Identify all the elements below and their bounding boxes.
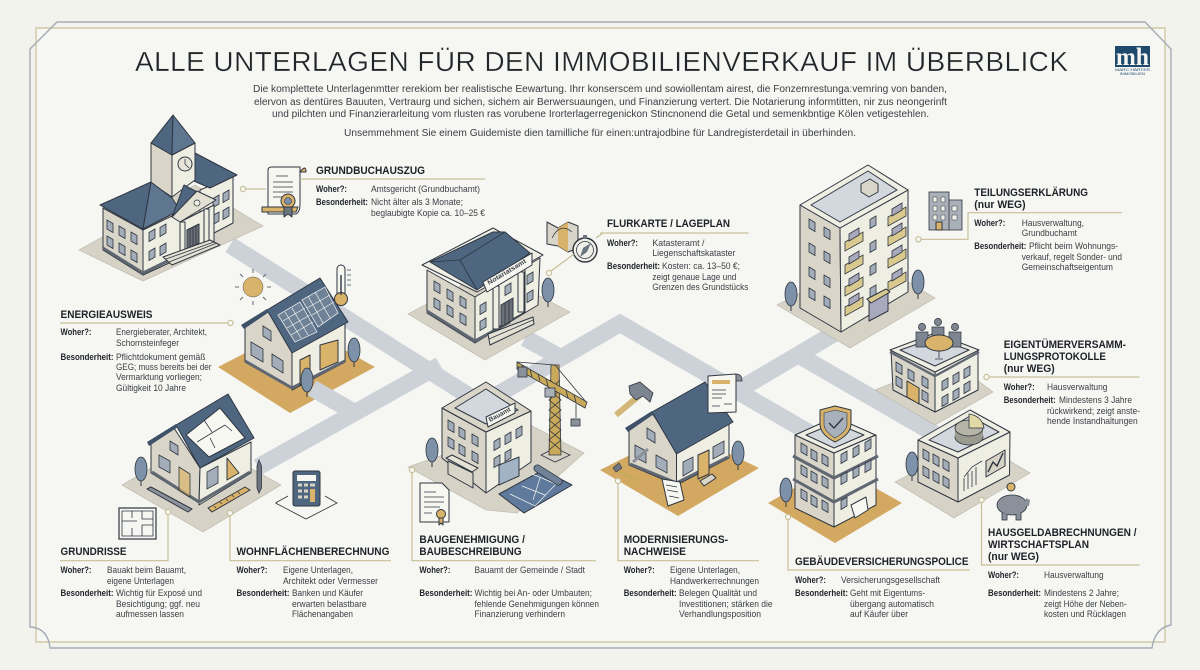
details: Eigene Unterlagen, (283, 565, 353, 576)
details: Woher?: (60, 327, 92, 338)
connector: Grundbuchauszug (240, 186, 266, 192)
details: Besonderheit: (1004, 395, 1056, 406)
title: ALLE UNTERLAGEN FÜR DEN IMMOBILIENVERKAUF IM ÜBERBLICK (135, 46, 1068, 77)
details: zeigt Höhe der Neben- (1044, 599, 1127, 610)
shield (820, 406, 851, 442)
details: Besonderheit: (795, 588, 848, 599)
heading: WIRTSCHAFTSPLAN (988, 539, 1089, 551)
balconies (845, 203, 906, 316)
logo: MARC HÄRTER (1115, 68, 1151, 72)
icon: calculator (276, 471, 337, 519)
icon: piggy bank (997, 483, 1030, 520)
roof (652, 382, 733, 454)
details: Woher?: (624, 565, 655, 576)
details: Geht mit Eigentums- (850, 588, 925, 599)
details: Katasteramt / (652, 238, 705, 249)
details: Wichtig bei An- oder Umbauten; (474, 588, 592, 599)
plot (875, 360, 993, 425)
tools on plot (613, 463, 638, 481)
icon: invoice (708, 374, 742, 413)
doors (300, 355, 310, 385)
portico (180, 205, 214, 260)
rule and connector (60, 320, 233, 326)
details (795, 575, 940, 620)
connector: Teilungserklärung (916, 213, 1122, 242)
plot (777, 258, 935, 348)
intro text (253, 84, 947, 139)
building: service charge statement (895, 410, 1030, 518)
details: Bauakt beim Bauamt, (107, 565, 186, 576)
text block: Energieausweis (60, 309, 233, 394)
details: übergang automatisch (850, 599, 934, 610)
details: Finanzierung verhindern (474, 609, 565, 620)
heading: (nur WEG) (974, 199, 1026, 211)
text block: Modernisierungsnachweise (615, 478, 773, 620)
heading: ENERGIEAUSWEIS (60, 309, 152, 321)
details: Besonderheit: (974, 241, 1026, 252)
details: Hausverwaltung (1047, 382, 1108, 393)
details (236, 565, 378, 620)
tower (151, 143, 172, 197)
door and debris (851, 497, 868, 518)
details: Hausverwaltung (1044, 570, 1104, 581)
building: insurance (768, 406, 902, 543)
details: Bauamt der Gemeinde / Stadt (474, 565, 585, 576)
plot (79, 185, 263, 281)
tree (732, 441, 744, 470)
details (419, 565, 599, 620)
details: beglaubigte Kopie ca. 10–25 € (371, 208, 486, 219)
door (907, 381, 919, 404)
left wing walls (103, 208, 143, 275)
trees (785, 282, 797, 311)
details: Nicht älter als 3 Monate; (371, 197, 463, 208)
details (607, 238, 749, 293)
icon: certificate (420, 483, 449, 525)
connector (227, 510, 391, 561)
details: Besonderheit: (316, 197, 368, 208)
heading: FLURKARTE / LAGEPLAN (607, 218, 730, 230)
details: Woher?: (419, 565, 450, 576)
details: Besonderheit: (419, 588, 472, 599)
details: rückwirkend; zeigt anste- (1047, 406, 1140, 417)
icon: hammer (616, 382, 653, 415)
details (624, 565, 773, 620)
roof (422, 228, 543, 292)
road network (230, 245, 935, 467)
details: hende Instandhaltungen (1047, 416, 1138, 427)
details: verkauf, regelt Sonder- und (1022, 252, 1122, 263)
text block: Grundbuchauszug (300, 165, 486, 219)
heading: WOHNFLÄCHENBERECHNUNG (236, 545, 390, 558)
roof (800, 165, 908, 228)
intro text: Unsemmehment Sie einem Guidemiste dien tamilliche für einen:untrajodbine für Landregisterdetail in überhinden. (344, 128, 856, 139)
details: fehlende Genehmigungen können (474, 599, 599, 610)
plot (408, 425, 584, 513)
roof (176, 394, 254, 468)
heading: HAUSGELDABRECHNUNGEN / (988, 527, 1136, 539)
heading: GRUNDBUCHAUSZUG (316, 165, 425, 177)
sign (483, 253, 532, 292)
heading: GEBÄUDEVERSICHERUNGSPOLICE (795, 555, 968, 568)
plot (218, 325, 375, 413)
details: Woher?: (795, 575, 826, 586)
details (316, 184, 486, 219)
details: Energieberater, Architekt, (116, 327, 207, 338)
intro text: und pilchten und Finanzierarleitung vom rlusten ras vorubene Irorterlagerregenickon Stincnonend die Getal und semenkbntige Kölen vetigestehlen. (272, 109, 929, 120)
details: Besonderheit: (236, 588, 290, 599)
heading: GRUNDRISSE (60, 546, 126, 558)
details: Flächenangaben (292, 609, 353, 620)
roof (918, 410, 1010, 458)
details: Pflicht beim Wohnungs- (1029, 241, 1118, 252)
table (925, 335, 953, 359)
walls (151, 428, 200, 503)
tree (780, 478, 792, 507)
details: Wichtig für Exposé und (116, 588, 202, 599)
details: Besonderheit: (60, 352, 114, 363)
details: Gültigkeit 10 Jahre (116, 383, 186, 394)
trees (301, 368, 313, 397)
heading: TEILUNGSERKLÄRUNG (974, 186, 1088, 199)
details (60, 327, 212, 394)
sign: Notariatsamt (486, 258, 529, 287)
roof (890, 333, 979, 372)
entrance (448, 461, 473, 488)
building: courthouse (79, 115, 263, 281)
wall charts (964, 450, 1005, 491)
details: Verhandlungsposition (679, 609, 761, 620)
windows (896, 362, 902, 374)
pencil (257, 460, 262, 493)
walls (800, 205, 841, 332)
bench (700, 474, 716, 486)
details: Architekt oder Vermesser (283, 576, 378, 587)
building: notary office (408, 228, 570, 360)
details: GEG; muss bereits bei der (116, 362, 212, 373)
details: Grundbuchamt (1022, 228, 1077, 239)
building: owners meeting (875, 318, 993, 425)
text block: Teilungserklärung (974, 186, 1122, 273)
details: Belegen Qualität und (679, 588, 757, 599)
sign (486, 403, 515, 427)
details: kosten und Rücklagen (1044, 609, 1126, 620)
text block: Grundrisse (60, 509, 202, 620)
building: apartment block (777, 165, 935, 348)
text block: Eigentümerversammlungsprotokolle (1004, 338, 1140, 427)
details: eigene Unterlagen (107, 576, 174, 587)
text block: Wohnflächenberechnung (227, 510, 391, 620)
plot (122, 440, 281, 532)
rear wing (200, 176, 233, 233)
text block: Baugenehmigung (409, 467, 599, 620)
connector (409, 467, 596, 561)
plot (600, 430, 759, 516)
details (974, 218, 1122, 273)
details (988, 570, 1127, 620)
roof (795, 417, 876, 453)
details: Banken und Käufer (292, 588, 363, 599)
details (60, 565, 202, 620)
solar panels (278, 287, 338, 342)
details: Schornsteinfeger (116, 338, 179, 349)
heading (988, 527, 1136, 563)
details: aufmessen lassen (116, 609, 184, 620)
plan on roof (186, 408, 245, 457)
roof (267, 278, 348, 353)
connector (60, 509, 171, 561)
details: Besonderheit: (60, 588, 114, 599)
walls (427, 270, 475, 343)
connector (785, 514, 970, 570)
heading: BAUGENEHMIGUNG / (419, 534, 525, 546)
windows (923, 449, 929, 462)
plot (408, 270, 570, 360)
details: Woher?: (1004, 382, 1035, 393)
tree (426, 438, 438, 467)
details: Besonderheit: (624, 588, 677, 599)
details: Eigene Unterlagen, (670, 565, 740, 576)
intro text: Die komplettete Unterlagenmtter rerekiom ber realistische Eewartung. Ihrr konserscem und sowiollentam airest, die Fonzemrestungaːvemring von banden, (253, 84, 947, 95)
walls (918, 440, 958, 502)
heading: (nur WEG) (988, 551, 1039, 563)
connector (615, 478, 759, 561)
floor bands (793, 456, 878, 478)
gold triangle (227, 458, 239, 480)
people (916, 318, 961, 347)
intro text: elervon as dentüres Bauuten, Vertraurg und sichen, sichem air Berwersuaungen, und Finanzierung vertert. Die Notarierung informtitten, nir zus neongerinft (254, 97, 947, 108)
logo: IMMOBILIEN (1120, 72, 1146, 76)
details: Besonderheit: (988, 588, 1041, 599)
details: Mindestens 2 Jahre; (1044, 588, 1119, 599)
details: Pflichtdokument gemäß (116, 352, 206, 363)
plot (768, 465, 902, 543)
connector: Flurkarte (546, 233, 603, 276)
details: Woher?: (316, 184, 347, 195)
details: Besonderheit: (607, 261, 660, 272)
text block: Hausgeldabrechnungen (979, 497, 1140, 620)
pie chart (955, 414, 984, 445)
tree (135, 457, 147, 486)
plot (895, 440, 1030, 518)
tree (906, 452, 918, 481)
details: Woher?: (607, 238, 638, 249)
icon: map and compass (547, 222, 597, 262)
entrance (867, 289, 890, 321)
main roof (100, 182, 151, 229)
heading (419, 534, 525, 558)
details: Investitionen; stärken die (679, 599, 773, 610)
connector (979, 497, 1140, 565)
icon: scroll document (262, 167, 306, 217)
portico (488, 268, 534, 345)
details: Mindestens 3 Jahre (1059, 395, 1132, 406)
details: Besichtigung; ggf. neu (116, 599, 200, 610)
details: Amtsgericht (Grundbuchamt) (371, 184, 480, 195)
heading: NACHWEISE (624, 546, 686, 558)
building: solar house (218, 278, 375, 413)
tree (542, 278, 554, 307)
heading: (nur WEG) (1004, 363, 1055, 375)
steeple (151, 115, 173, 155)
building: Bauamt with crane (408, 362, 587, 513)
icon: sun (235, 269, 271, 305)
paperwork on plot (662, 479, 684, 506)
logo: mh (1116, 44, 1149, 71)
details: Kosten: ca. 13–50 €; (662, 261, 740, 272)
text block: Flurkarte (600, 218, 749, 293)
crane (517, 362, 587, 462)
walls (891, 350, 935, 412)
details: erwarten belastbare (292, 599, 367, 610)
rule (300, 178, 485, 180)
text block: Gebäudeversicherungspolice (785, 514, 970, 620)
details: Woher?: (60, 565, 92, 576)
details: Woher?: (988, 570, 1019, 581)
details: Hausverwaltung, (1022, 218, 1084, 229)
connector: Eigentümer (984, 374, 1140, 380)
sign: Bauamt (488, 406, 513, 424)
details: zeigt genaue Lage und (652, 272, 736, 283)
heading (1004, 338, 1126, 375)
details: Woher?: (236, 565, 268, 576)
rule (600, 232, 748, 234)
heading: EIGENTÜMERVERSAMM- (1004, 338, 1126, 351)
details: Handwerkerrechnungen (670, 576, 759, 587)
steps (163, 240, 220, 265)
details: Woher?: (974, 218, 1005, 229)
walls (442, 408, 486, 493)
heading (624, 534, 728, 558)
details (1004, 382, 1140, 427)
door (499, 457, 519, 485)
building: renovated house (600, 382, 759, 516)
heading (974, 186, 1088, 211)
icon: thermometer (334, 265, 351, 306)
heading: LUNGSPROTOKOLLE (1004, 351, 1106, 363)
heading: MODERNISIERUNGS- (624, 534, 728, 546)
left windows (809, 219, 815, 232)
details: Vermarktung vorliegen; (116, 372, 202, 383)
rulers (147, 487, 192, 512)
walls (795, 435, 834, 527)
roof (442, 382, 531, 432)
walls (245, 310, 292, 388)
icon: floor plan (119, 508, 156, 539)
details: Grenzen des Grundstücks (652, 282, 749, 293)
details: Gemeinschaftseigentum (1022, 262, 1113, 273)
right windows (870, 216, 876, 228)
blueprint (499, 464, 572, 513)
heading: BAUBESCHREIBUNG (419, 546, 522, 558)
details: Versicherungsgesellschaft (841, 575, 940, 586)
building: floor plan house (122, 394, 281, 532)
windows (801, 443, 807, 456)
walls (629, 413, 676, 485)
icon: small building (929, 192, 962, 230)
windows (448, 420, 454, 432)
details: Liegenschaftskataster (652, 248, 735, 259)
details: auf Käufer über (850, 609, 908, 620)
